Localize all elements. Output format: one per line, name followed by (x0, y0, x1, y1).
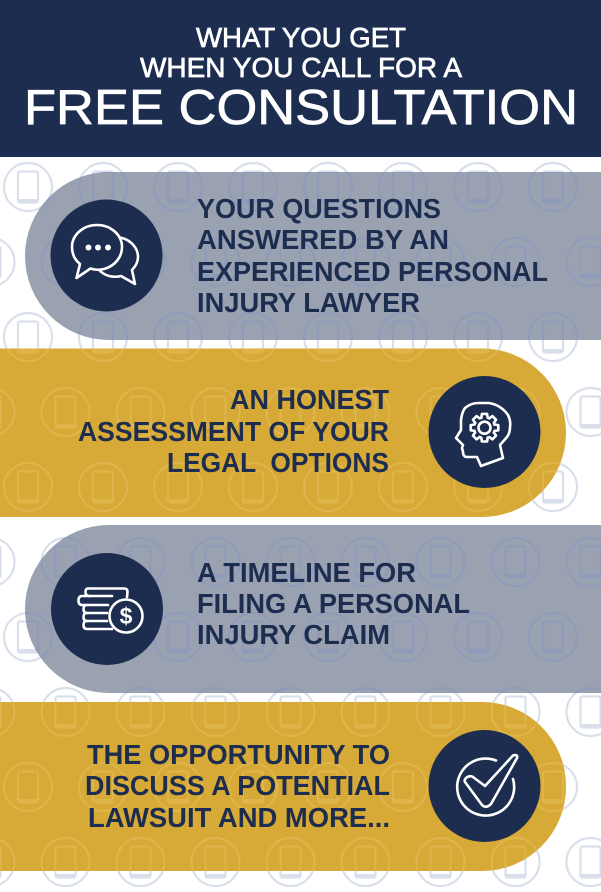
icon: check mark in circle (428, 730, 540, 842)
panel: lawsuit opportunity (0, 702, 566, 871)
panel text: ASSESSMENT OF YOUR (78, 416, 389, 447)
icon: coins and dollar (51, 553, 163, 665)
panel text (85, 739, 390, 833)
title line 2: WHEN YOU CALL FOR A (140, 52, 462, 83)
panel text: INJURY CLAIM (197, 619, 390, 650)
icon: head with gear (428, 376, 540, 488)
panel text (197, 193, 548, 318)
icon: speech bubbles (50, 200, 162, 312)
panel text: AN HONEST (230, 384, 389, 415)
panel: honest assessment (0, 348, 566, 517)
panel: timeline (25, 525, 601, 693)
dollar sign: $ (120, 603, 133, 629)
panel text: FILING A PERSONAL (197, 588, 470, 619)
panel text: EXPERIENCED PERSONAL (197, 256, 548, 287)
header banner (0, 0, 601, 157)
panel text: A TIMELINE FOR (197, 557, 416, 588)
title line 1: WHAT YOU GET (196, 22, 406, 53)
panel text: ANSWERED BY AN (197, 224, 449, 255)
panel text: LEGAL OPTIONS (167, 447, 389, 478)
panel text (197, 557, 470, 650)
panel text (78, 384, 389, 478)
panel text: INJURY LAWYER (197, 287, 420, 318)
panel: questions answered (25, 172, 601, 340)
panel text: THE OPPORTUNITY TO (87, 739, 390, 770)
panel text: YOUR QUESTIONS (197, 193, 441, 224)
title line 3: FREE CONSULTATION (24, 81, 578, 135)
panel text: LAWSUIT AND MORE... (88, 802, 390, 833)
panel text: DISCUSS A POTENTIAL (85, 770, 390, 801)
